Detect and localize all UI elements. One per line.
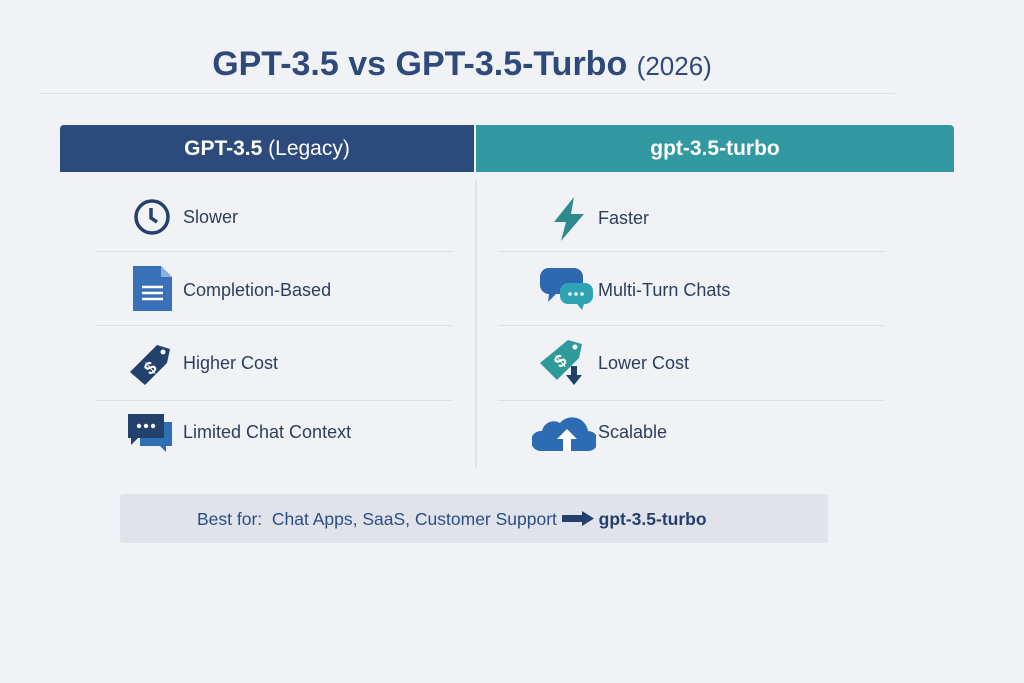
header: legacy bbox=[60, 125, 474, 172]
icon: clock bbox=[134, 199, 170, 235]
text: slower: Slower bbox=[183, 207, 238, 227]
icon: lightning bbox=[554, 197, 584, 241]
icon: cloud bbox=[532, 417, 596, 451]
text: completion: Completion-Based bbox=[183, 280, 331, 300]
text: scalable: Scalable bbox=[598, 422, 667, 442]
callout: best for: Best for: Chat Apps, SaaS, Customer Support gpt-3.5-turbo bbox=[197, 509, 707, 529]
title: GPT-3.5 vs GPT-3.5-Turbo (2026) bbox=[212, 45, 712, 83]
header: turbo: gpt-3.5-turbo bbox=[650, 137, 780, 160]
icon: price tag bbox=[130, 345, 170, 385]
icon: chat bbox=[128, 414, 172, 452]
icon: price tag: $ bbox=[140, 357, 161, 379]
icon: tag down bbox=[540, 340, 582, 385]
header: turbo bbox=[476, 125, 954, 172]
text: higher cost: Higher Cost bbox=[183, 353, 278, 373]
text: limited chat: Limited Chat Context bbox=[183, 422, 351, 442]
callout: best for bbox=[120, 494, 828, 543]
header: legacy: GPT-3.5 (Legacy) bbox=[184, 137, 350, 160]
icon: chats bbox=[540, 268, 593, 310]
icon: tag down: $ bbox=[550, 350, 571, 372]
text: multi-turn: Multi-Turn Chats bbox=[598, 280, 730, 300]
text: lower cost: Lower Cost bbox=[598, 353, 689, 373]
icon: document bbox=[133, 266, 172, 311]
text: faster: Faster bbox=[598, 208, 649, 228]
